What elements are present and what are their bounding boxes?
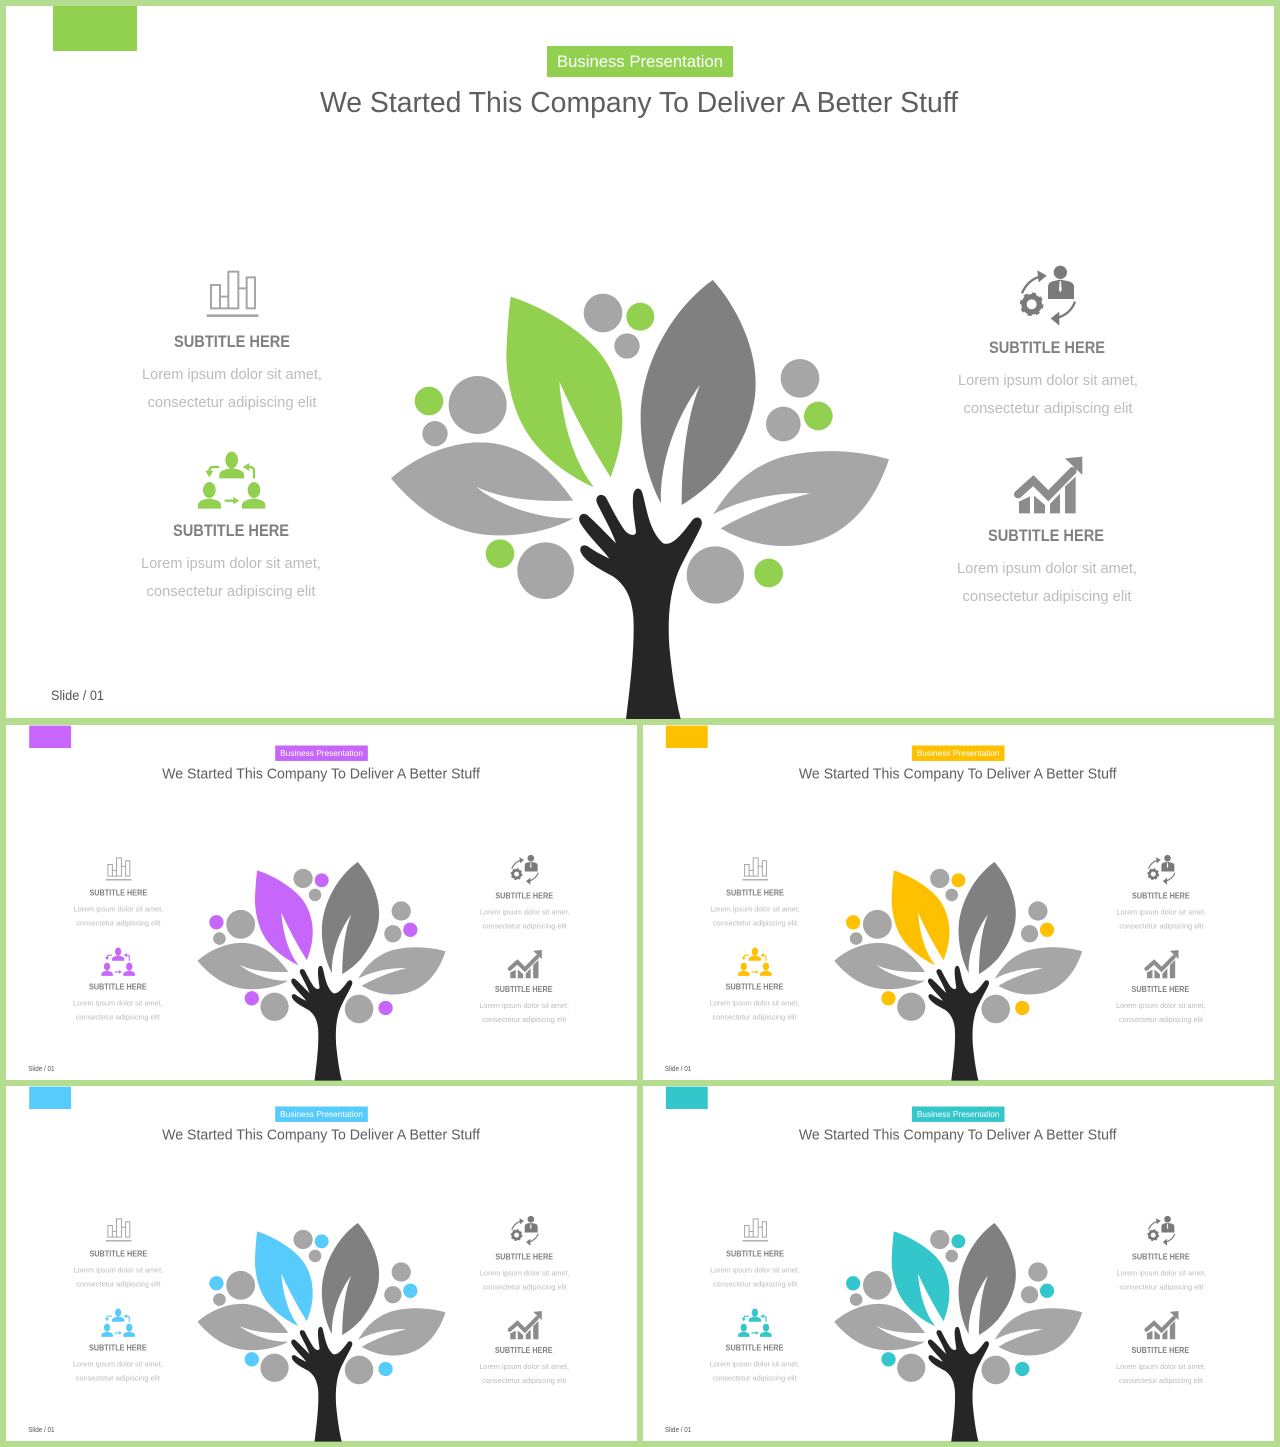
panel: slide teal: consectetur adipiscing elit bbox=[1119, 1376, 1204, 1385]
panel: slide teal: consectetur adipiscing elit bbox=[712, 1373, 798, 1382]
panel: slide yellow: SUBTITLE HERE bbox=[1132, 984, 1190, 994]
panel: slide purple: Lorem ipsum dolor sit amet, bbox=[479, 1001, 569, 1010]
block: left top text bbox=[142, 332, 322, 411]
panel: slide teal: We Started This Company To Deliver A Better Stuff bbox=[799, 1127, 1118, 1143]
panel: slide yellow bbox=[643, 725, 1274, 1081]
panel: slide teal: Lorem ipsum dolor sit amet, bbox=[1116, 1362, 1206, 1371]
block: left bottom text: consectetur adipiscing elit bbox=[146, 583, 316, 600]
panel: slide blue bbox=[6, 1086, 637, 1442]
icon: growth bbox=[1018, 457, 1082, 513]
panel: slide blue: SUBTITLE HERE bbox=[89, 1248, 148, 1258]
block: left bottom text: SUBTITLE HERE bbox=[173, 521, 289, 540]
block: right bottom text: SUBTITLE HERE bbox=[988, 526, 1104, 545]
panel: slide teal: Lorem ipsum dolor sit amet, bbox=[1117, 1268, 1206, 1277]
panel: slide teal: Slide / 01 bbox=[665, 1427, 691, 1434]
slide number: Slide / 01 bbox=[51, 687, 104, 703]
icon: cycle bbox=[1021, 266, 1075, 326]
block: left top text: SUBTITLE HERE bbox=[174, 332, 290, 351]
panel: slide teal: SUBTITLE HERE bbox=[726, 1248, 784, 1258]
panel: slide yellow: Slide / 01 bbox=[665, 1066, 691, 1073]
panel: slide blue: Lorem ipsum dolor sit amet, bbox=[74, 1265, 163, 1274]
panel: slide blue: consectetur adipiscing elit bbox=[76, 1279, 161, 1288]
panel: slide yellow: SUBTITLE HERE bbox=[726, 887, 784, 897]
panel: slide purple: SUBTITLE HERE bbox=[495, 890, 553, 900]
block: left top text: Lorem ipsum dolor sit amet, bbox=[142, 366, 322, 383]
panel: slide yellow: Lorem ipsum dolor sit amet, bbox=[1117, 907, 1206, 916]
block: left bottom text bbox=[141, 521, 321, 600]
panel: slide teal: consectetur adipiscing elit bbox=[1119, 1282, 1204, 1291]
panel: slide yellow: Lorem ipsum dolor sit amet, bbox=[710, 998, 799, 1007]
panel: slide blue: SUBTITLE HERE bbox=[495, 1345, 553, 1355]
block: right top text: SUBTITLE HERE bbox=[989, 338, 1105, 357]
block: right bottom text bbox=[957, 526, 1137, 605]
panel: slide yellow: consectetur adipiscing elit bbox=[1119, 1015, 1204, 1024]
panel: slide teal: SUBTITLE HERE bbox=[1132, 1345, 1190, 1355]
block: right top text: Lorem ipsum dolor sit amet, bbox=[958, 372, 1138, 389]
block: right bottom text: consectetur adipiscing elit bbox=[962, 588, 1132, 605]
panel: slide blue: consectetur adipiscing elit bbox=[482, 1376, 567, 1385]
icon: team bbox=[198, 452, 265, 509]
panel: slide blue: SUBTITLE HERE bbox=[495, 1251, 553, 1261]
panel: slide yellow: Business Presentation bbox=[917, 748, 1000, 758]
panel: slide purple: consectetur adipiscing elit bbox=[483, 921, 568, 930]
panel: slide teal: consectetur adipiscing elit bbox=[713, 1279, 798, 1288]
panel: main slide green bbox=[6, 6, 1274, 719]
panel: slide yellow: Lorem ipsum dolor sit amet, bbox=[710, 904, 800, 913]
panel: slide purple: consectetur adipiscing elit bbox=[76, 1012, 161, 1021]
panel: slide teal: Lorem ipsum dolor sit amet, bbox=[710, 1265, 800, 1274]
panel: slide blue: Business Presentation bbox=[280, 1109, 363, 1119]
panel: slide purple: Lorem ipsum dolor sit amet, bbox=[73, 998, 163, 1007]
panel: slide purple: SUBTITLE HERE bbox=[89, 982, 147, 992]
panel: slide yellow: consectetur adipiscing elit bbox=[1119, 921, 1204, 930]
panel: slide purple: consectetur adipiscing elit bbox=[482, 1015, 567, 1024]
panel: slide yellow: consectetur adipiscing elit bbox=[713, 918, 798, 927]
panel: slide yellow: consectetur adipiscing elit bbox=[712, 1012, 798, 1021]
block: right bottom text: Lorem ipsum dolor sit amet, bbox=[957, 560, 1137, 577]
panel: slide blue: Slide / 01 bbox=[28, 1427, 55, 1434]
accent tab bbox=[53, 6, 137, 51]
block: right top text: consectetur adipiscing elit bbox=[964, 400, 1133, 417]
panel: slide blue: Lorem ipsum dolor sit amet, bbox=[480, 1268, 570, 1277]
panel: slide yellow: SUBTITLE HERE bbox=[726, 982, 784, 992]
panel: slide teal: Lorem ipsum dolor sit amet, bbox=[710, 1359, 799, 1368]
panel: slide purple: Slide / 01 bbox=[28, 1066, 55, 1073]
panel: slide purple: SUBTITLE HERE bbox=[495, 984, 553, 994]
block: right top text bbox=[958, 338, 1138, 417]
panel: slide purple: Business Presentation bbox=[280, 748, 363, 758]
tag: Business Presentation bbox=[547, 46, 733, 77]
block: left bottom text: Lorem ipsum dolor sit amet, bbox=[141, 555, 321, 572]
panel: slide purple: We Started This Company To Deliver A Better Stuff bbox=[162, 766, 481, 782]
panel: slide yellow: Lorem ipsum dolor sit amet, bbox=[1116, 1001, 1206, 1010]
panel: slide purple: Lorem ipsum dolor sit amet, bbox=[74, 904, 163, 913]
panel: slide yellow: SUBTITLE HERE bbox=[1132, 890, 1190, 900]
panel: slide blue: consectetur adipiscing elit bbox=[76, 1373, 161, 1382]
panel: slide yellow: We Started This Company To Deliver A Better Stuff bbox=[799, 766, 1118, 782]
block: left top text: consectetur adipiscing elit bbox=[148, 394, 317, 411]
panel: slide teal: Business Presentation bbox=[917, 1109, 1000, 1119]
panel: slide purple bbox=[6, 725, 637, 1081]
panel: slide purple: consectetur adipiscing elit bbox=[76, 918, 161, 927]
panel: slide blue: Lorem ipsum dolor sit amet, bbox=[73, 1359, 163, 1368]
tag: Business Presentation: Business Presentation bbox=[557, 52, 723, 71]
panel: slide blue: We Started This Company To Deliver A Better Stuff bbox=[162, 1127, 481, 1143]
panel: slide purple: SUBTITLE HERE bbox=[89, 887, 148, 897]
panel: slide blue: Lorem ipsum dolor sit amet, bbox=[479, 1362, 569, 1371]
icon: bar chart bbox=[207, 272, 258, 317]
panel: slide teal: SUBTITLE HERE bbox=[1132, 1251, 1190, 1261]
tree with hand trunk bbox=[391, 280, 889, 719]
panel: slide blue: SUBTITLE HERE bbox=[89, 1343, 147, 1353]
panel: slide purple: Lorem ipsum dolor sit amet, bbox=[480, 907, 570, 916]
panel: slide teal bbox=[643, 1086, 1274, 1442]
title: We Started This Company To Deliver A Better Stuff bbox=[320, 87, 959, 119]
panel: slide teal: SUBTITLE HERE bbox=[726, 1343, 784, 1353]
panel: slide blue: consectetur adipiscing elit bbox=[483, 1282, 568, 1291]
